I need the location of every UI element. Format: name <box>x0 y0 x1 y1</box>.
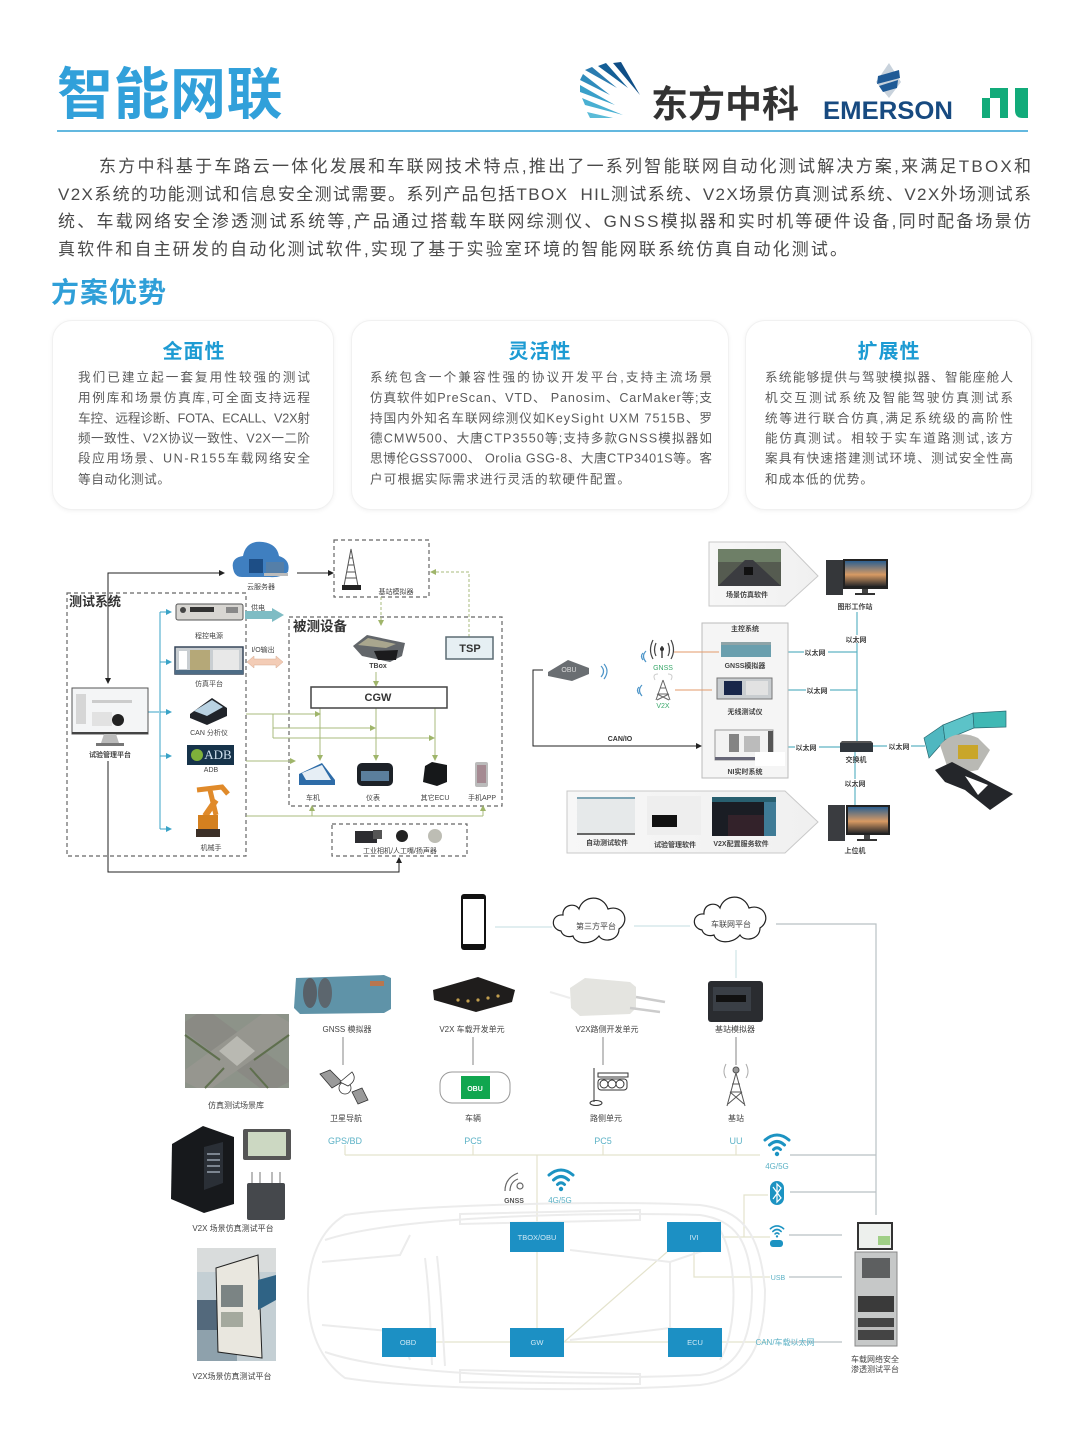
device: sensors: 工业相机/人工嘴/扬声器 <box>363 846 437 855</box>
panel text: scalability: 统等进行联合仿真,满足系统级的高阶性 <box>765 410 1013 426</box>
device: OBU <box>548 660 607 681</box>
image: scene library <box>185 1014 289 1110</box>
panel text: scalability: 机交互测试系统及智能驾驶仿真测试系 <box>765 390 1013 405</box>
icon: arrow supply: 供电 <box>251 603 265 612</box>
device: V2X OBU dev unit: V2X 车载开发单元 <box>439 1024 505 1034</box>
icon: wifi 4G/5G right: 4G/5G <box>765 1162 789 1171</box>
panel text: scalability: 案具有快速搭建测试环境、测试安全性高 <box>765 450 1013 466</box>
device: head unit <box>299 763 335 802</box>
labels: ethernet <box>795 635 911 788</box>
photo: V2X test cabinet <box>192 1248 276 1381</box>
panel text: comprehensiveness: 用例库和场景仿真库,可全面支持远程 <box>78 390 310 405</box>
device: phone <box>461 894 486 950</box>
device: base station simulator <box>708 981 763 1034</box>
ethernet lines <box>775 612 925 805</box>
icon: GNSS antenna: GNSS <box>653 665 673 672</box>
ECU: ECU: ECU <box>687 1338 703 1347</box>
panel: scalability <box>745 320 1032 510</box>
ECU: GW: GW <box>531 1338 544 1347</box>
panel: software arrow: 试验管理软件 <box>654 840 696 849</box>
panel text: scalability: 扩展性 <box>858 340 920 363</box>
icon: roadside traffic light: 路侧单元 <box>590 1113 622 1123</box>
device: instrument: 仪表 <box>366 793 380 802</box>
panel: sensors box <box>332 824 467 856</box>
device: driving simulator <box>924 711 1013 810</box>
panel: device under test box <box>289 617 502 806</box>
diagram: V2X simulation test system <box>532 542 1013 855</box>
icon: GNSS antenna <box>642 640 719 672</box>
device: V2X box <box>192 1172 285 1233</box>
icon: wifi bluetooth small <box>770 1226 784 1247</box>
device: V2X roadside unit <box>550 978 665 1034</box>
device: host PC <box>828 805 890 855</box>
device: robot arm: 机械手 <box>200 843 222 852</box>
icon: base station tower: 基站模拟器 <box>378 587 414 596</box>
device: TBox: TBox <box>369 663 387 670</box>
icon: vehicle OBU <box>440 1072 510 1123</box>
icon: satellite: 卫星导航 <box>330 1113 362 1123</box>
panel text: comprehensiveness: 全面性 <box>162 339 226 363</box>
intro paragraph: 真软件和自主研发的自动化测试软件,实现了基于实验室环境的智能网联系统仿真自动化测试。 <box>58 240 847 259</box>
device: GNSS simulator <box>294 975 391 1034</box>
panel text: scalability <box>765 340 1013 486</box>
panel text: comprehensiveness: 我们已建立起一套复用性较强的测试 <box>78 370 310 384</box>
intro paragraph: 统、车载网络安全渗透测试系统等,产品通过搭载车联网综测仪、GNSS模拟器和实时机等硬件设备,同时配备场景仿 <box>58 212 1031 231</box>
teal branch connectors <box>148 612 171 829</box>
heading: solution advantages: 方案优势 <box>51 277 167 308</box>
panel: scenario software arrow: 场景仿真软件 <box>726 590 768 599</box>
label: DUT: 被测设备 <box>293 618 347 634</box>
device: sensors <box>355 829 442 855</box>
panel text: flexibility: 思博伦GSS7000、 Orolia GSG-8、大唐CTP3401S等。客 <box>370 450 712 466</box>
device: switch: 交换机 <box>846 755 866 764</box>
icon: roadside traffic light <box>590 1068 628 1123</box>
panel text: comprehensiveness: 等自动化测试。 <box>78 472 170 486</box>
logo: Emerson <box>823 63 953 125</box>
intro paragraph <box>58 157 1031 259</box>
panel text: flexibility: 户可根据实际需求进行灵活的软硬件配置。 <box>370 472 630 486</box>
connectors: cloud layer <box>495 926 736 978</box>
ECU: IVI: IVI <box>689 1233 699 1242</box>
device: test management monitor: 试验管理平台 <box>89 750 131 759</box>
cloud: third-party platform: 第三方平台 <box>576 921 616 931</box>
device: V2X OBU dev unit <box>433 977 515 1034</box>
panel text: scalability: 系统能够提供与驾驶模拟器、智能座舱人 <box>765 370 1013 384</box>
device: other ECU: 其它ECU <box>421 793 449 802</box>
ECU: OBD <box>382 1328 436 1357</box>
labels: link types <box>328 1136 742 1146</box>
panel: comprehensiveness <box>52 320 334 510</box>
connector: CAN/IO: CAN/IO <box>608 736 633 743</box>
labels: link types: PC5 <box>594 1136 612 1146</box>
icon: cloud server: 云服务器 <box>247 582 275 591</box>
device: power supply <box>176 604 243 640</box>
icon: bluetooth <box>770 1181 784 1205</box>
box: CGW <box>311 687 447 708</box>
panel text: comprehensiveness: 频一致性、V2X协议一致性、V2X一二阶 <box>78 432 310 446</box>
device: V2X box: V2X 场景仿真测试平台 <box>192 1223 274 1233</box>
device: CAN analyzer <box>190 698 228 737</box>
panel: software arrow <box>567 791 818 853</box>
panel text: flexibility <box>370 340 712 486</box>
logo: Emerson: EMERSON <box>823 97 953 125</box>
ECU: OBD: OBD <box>400 1338 417 1347</box>
labels: ethernet: 以太网 <box>844 779 866 788</box>
intro paragraph: V2X系统的功能测试和信息安全测试需要。系列产品包括TBOX HIL测试系统、V2X场景仿真测试系统、V2X外场测试系 <box>58 185 1031 204</box>
device: other ECU <box>421 762 449 802</box>
device: CAN analyzer: CAN 分析仪 <box>190 728 228 737</box>
photo: V2X test cabinet: V2X场景仿真测试平台 <box>192 1371 272 1381</box>
green connectors <box>246 572 483 816</box>
ECU: TBOX/OBU <box>510 1222 564 1252</box>
diagram: V2X scene and security test <box>171 894 899 1390</box>
label: CAN ethernet: CAN/车载以太网 <box>755 1337 815 1347</box>
connectors: beige bus <box>345 1145 770 1342</box>
panel text: flexibility: 持国内外知名车联网综测仪如KeySight UXM 7515B、罗 <box>370 410 712 426</box>
icon: IO arrow <box>247 645 283 668</box>
logo: Orient Zhongke: 东方中科 <box>651 84 799 125</box>
illustration: car outline <box>308 1203 765 1389</box>
ECU: GW <box>510 1328 564 1357</box>
header rule <box>57 130 1028 132</box>
panel: test system box <box>67 593 246 856</box>
connector: CAN/IO <box>533 670 701 746</box>
device: graphics workstation <box>826 559 888 611</box>
panel: base station simulator box <box>334 540 429 597</box>
device: security test rig: 渗透测试平台 <box>851 1364 899 1374</box>
device: OBU: OBU <box>561 667 577 674</box>
panel: scenario software arrow <box>709 542 818 606</box>
icon: vehicle OBU: OBU <box>467 1086 483 1093</box>
device: GNSS simulator: GNSS 模拟器 <box>323 1024 371 1034</box>
panel: software arrow: V2X配置服务软件 <box>713 839 769 848</box>
device: simulation platform <box>175 647 243 688</box>
black connectors <box>108 573 399 872</box>
labels: link types: UU <box>730 1136 742 1146</box>
labels: ethernet: 以太网 <box>806 686 828 695</box>
icon: satellite <box>320 1070 368 1123</box>
device: GNSS simulator <box>721 642 771 670</box>
panel text: comprehensiveness: 段应用场景、UN-R155车载网络安全 <box>78 450 310 466</box>
icon: wifi 4G/5G right <box>765 1135 789 1171</box>
icon: base station tower: 基站 <box>728 1113 744 1123</box>
labels: ethernet: 以太网 <box>888 742 910 751</box>
device: V2X rack <box>171 1126 234 1213</box>
cloud: IoV platform: 车联网平台 <box>711 919 751 929</box>
cloud: IoV platform <box>694 897 766 942</box>
device: test management monitor <box>72 688 148 759</box>
icon: base station tower <box>724 1064 748 1123</box>
box: TSP: TSP <box>459 643 481 655</box>
device: simulation platform: 仿真平台 <box>195 679 223 688</box>
image: scene library: 仿真测试场景库 <box>208 1100 264 1110</box>
icon: vehicle OBU: 车辆 <box>465 1113 481 1123</box>
title: 智能网联 <box>57 63 283 126</box>
device: ADB: ADB <box>204 747 232 762</box>
ECU: IVI <box>667 1222 721 1252</box>
icon: IO arrow: I/O输出 <box>251 645 275 654</box>
panel text: flexibility: 系统包含一个兼容性强的协议开发平台,支持主流场景 <box>370 370 712 384</box>
device: base station simulator: 基站模拟器 <box>715 1024 755 1034</box>
icon: V2X tower: V2X <box>656 703 670 710</box>
device: security test rig: 车载网络安全 <box>851 1354 899 1364</box>
logo: Orient Zhongke <box>580 62 799 125</box>
intro paragraph: 东方中科基于车路云一体化发展和车联网技术特点,推出了一系列智能联网自动化测试解决方案,来满足TBOX和 <box>99 157 1031 176</box>
device: wireless tester <box>717 678 772 716</box>
label: USB: USB <box>771 1275 786 1282</box>
icon: cloud server <box>233 542 289 591</box>
device: GNSS simulator: GNSS模拟器 <box>725 661 765 670</box>
device: graphics workstation: 图形工作站 <box>838 602 872 611</box>
icon: GNSS: GNSS <box>504 1198 524 1205</box>
device: switch <box>840 741 873 764</box>
device: NI realtime system: NI实时系统 <box>728 767 762 776</box>
device: phone app: 手机APP <box>468 793 496 802</box>
panel: main control system <box>702 623 788 778</box>
labels: ethernet: 以太网 <box>796 743 816 752</box>
panel text: comprehensiveness <box>78 339 310 486</box>
device: security test rig <box>851 1222 899 1374</box>
icon: base station tower <box>342 549 414 596</box>
device: ADB <box>187 745 234 774</box>
device: V2X roadside unit: V2X路侧开发单元 <box>575 1024 639 1034</box>
icon: wifi 4G/5G car <box>548 1170 573 1205</box>
diagram: T-Box HIL test system <box>66 539 503 872</box>
panel text: flexibility: 灵活性 <box>508 340 572 363</box>
device: wireless tester: 无线测试仪 <box>728 707 762 716</box>
device: power supply: 程控电源 <box>195 631 223 640</box>
panel: software arrow: 自动测试软件 <box>586 838 628 847</box>
labels: ethernet: 以太网 <box>846 635 866 644</box>
logo: NI <box>982 88 1028 118</box>
box: CGW: CGW <box>365 692 392 704</box>
label: test system: 测试系统 <box>69 594 121 609</box>
panel text: flexibility: 仿真软件如PreScan、VTD、 Panosim、CarMaker等;支 <box>370 390 712 405</box>
device: ADB: ADB <box>204 767 219 774</box>
device: tablet <box>243 1129 291 1160</box>
device: host PC: 上位机 <box>844 846 866 855</box>
labels: ethernet: 以太网 <box>804 648 826 657</box>
device: robot arm <box>196 787 228 852</box>
connectors: gray bus <box>343 924 876 1342</box>
device: head unit: 车机 <box>306 793 320 802</box>
labels: link types: GPS/BD <box>328 1136 363 1146</box>
panel: main control system: 主控系统 <box>731 624 759 633</box>
device: instrument <box>357 763 393 802</box>
panel text: flexibility: 德CMW500、大唐CTP3550等;支持多款GNSS模拟器如 <box>370 430 712 446</box>
cloud: third-party platform <box>553 898 625 943</box>
box: TSP <box>446 637 493 659</box>
ECU: ECU <box>668 1328 722 1357</box>
icon: arrow supply <box>245 603 284 622</box>
icon: wifi 4G/5G car: 4G/5G <box>548 1196 572 1205</box>
labels: link types: PC5 <box>464 1136 482 1146</box>
ECU: TBOX/OBU: TBOX/OBU <box>518 1233 556 1242</box>
icon: GNSS <box>504 1173 524 1205</box>
panel: flexibility <box>351 320 729 510</box>
icon: V2X tower <box>638 674 712 710</box>
device: phone app <box>468 762 496 802</box>
panel text: scalability: 能仿真测试。相较于实车道路测试,该方 <box>765 430 1013 446</box>
panel text: scalability: 和成本低的优势。 <box>765 472 873 486</box>
device: NI realtime system <box>715 730 785 776</box>
device: TBox <box>353 635 405 670</box>
panel text: comprehensiveness: 车控、远程诊断、FOTA、ECALL、V2X射 <box>78 410 310 426</box>
